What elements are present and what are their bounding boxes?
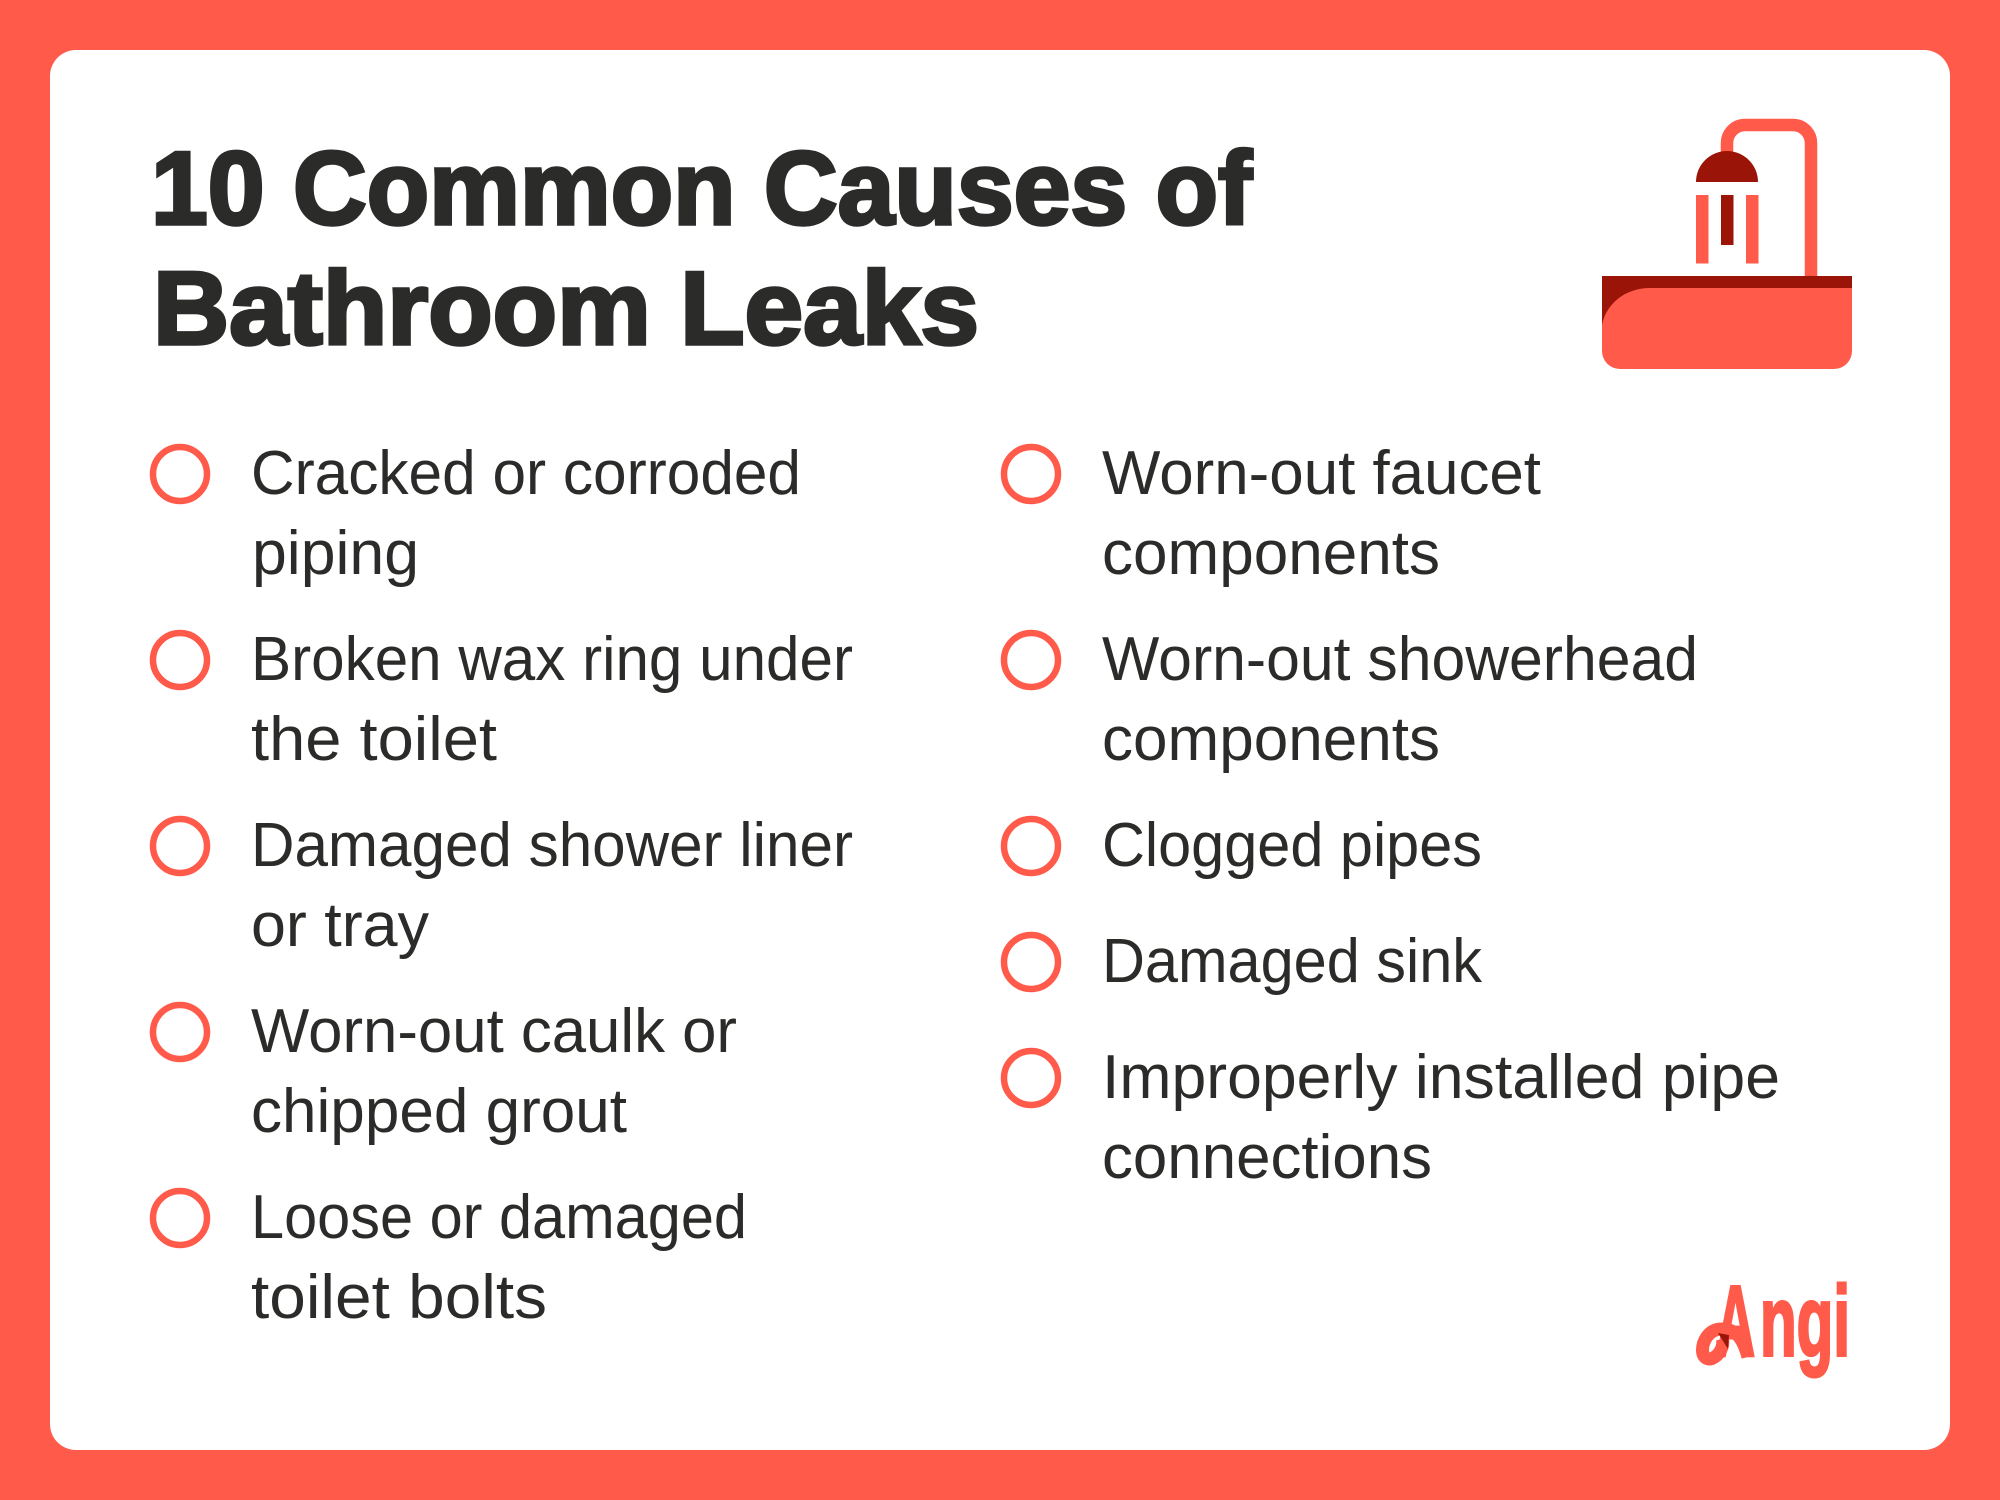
logo: Angi: ngi bbox=[1760, 1266, 1850, 1378]
list item: cracked piping: Cracked or corroded bbox=[251, 439, 801, 508]
list item: pipe connections: connections bbox=[1102, 1123, 1432, 1192]
logo: Angi: A bbox=[1716, 1266, 1755, 1378]
list item: showerhead components: Worn-out showerhead bbox=[1102, 625, 1698, 694]
list item: pipe connections: Improperly installed pipe bbox=[1102, 1043, 1780, 1112]
list item: faucet components: components bbox=[1102, 519, 1440, 588]
list item: toilet bolts: Loose or damaged bbox=[251, 1183, 747, 1252]
list item: cracked piping: piping bbox=[252, 519, 419, 588]
left column list bbox=[153, 439, 853, 1332]
list item: wax ring: the toilet bbox=[251, 705, 497, 774]
list item: wax ring: Broken wax ring under bbox=[251, 625, 853, 694]
list item: wax ring bbox=[153, 625, 853, 774]
list item: cracked piping bbox=[153, 439, 801, 588]
title: 10 Common Causes of bbox=[151, 131, 1252, 247]
list item: damaged sink: Damaged sink bbox=[1102, 927, 1483, 996]
list item: shower liner: Damaged shower liner bbox=[251, 811, 853, 880]
list item: toilet bolts bbox=[153, 1183, 747, 1332]
list item: shower liner bbox=[153, 811, 853, 960]
list item: showerhead components bbox=[1004, 625, 1698, 774]
list item: pipe connections bbox=[1004, 1043, 1780, 1192]
list item: caulk and grout bbox=[153, 997, 737, 1146]
list item: faucet components bbox=[1004, 439, 1541, 588]
icon: shower and bathtub bbox=[1602, 125, 1852, 369]
title: Bathroom Leaks bbox=[153, 251, 979, 367]
list item: caulk and grout: Worn-out caulk or bbox=[251, 997, 737, 1066]
list item: clogged pipes: Clogged pipes bbox=[1102, 811, 1482, 880]
right column list bbox=[1004, 439, 1780, 1192]
list item: showerhead components: components bbox=[1102, 705, 1440, 774]
logo: Angi bbox=[1702, 1266, 1850, 1378]
list item: caulk and grout: chipped grout bbox=[251, 1077, 627, 1146]
list item: shower liner: or tray bbox=[251, 891, 429, 960]
list item: faucet components: Worn-out faucet bbox=[1102, 439, 1541, 508]
list item: toilet bolts: toilet bolts bbox=[251, 1263, 547, 1332]
title bbox=[151, 131, 1252, 367]
